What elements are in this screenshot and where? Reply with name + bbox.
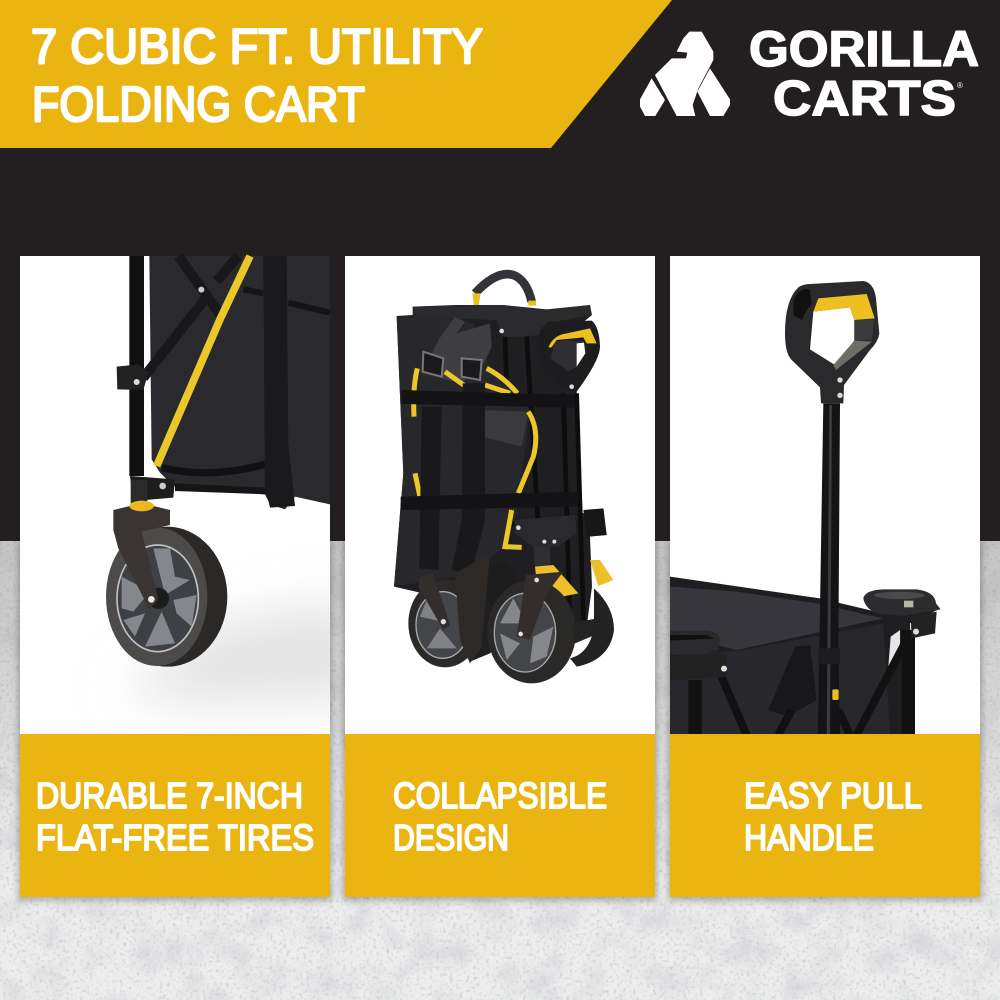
background: dark upper band <box>0 0 1000 541</box>
left cup holder <box>670 631 720 655</box>
floor shadow <box>140 594 330 716</box>
caption panel: collapsible: COLLAPSIBLE <box>393 775 607 816</box>
strap <box>263 256 295 508</box>
yellow trim <box>157 256 250 466</box>
left front wheel <box>408 579 482 667</box>
title: FOLDING CART <box>32 78 365 132</box>
photo: folded cart <box>394 274 614 683</box>
frame <box>505 337 583 627</box>
photo: cart with pull handle <box>670 281 941 735</box>
cart silhouette <box>394 305 607 662</box>
title <box>31 20 483 132</box>
back wheels <box>570 588 614 667</box>
panel: tires <box>20 253 330 734</box>
pull handle <box>539 321 600 392</box>
caption panel: tires: DURABLE 7-INCH <box>36 775 303 816</box>
caption panel: tires: FLAT-FREE TIRES <box>36 817 314 858</box>
photo area <box>670 256 980 734</box>
bracket <box>117 364 148 390</box>
title: 7 CUBIC FT. UTILITY <box>31 20 483 74</box>
caption panel: collapsible <box>345 734 655 897</box>
main front wheel <box>487 580 576 683</box>
gap beneath frame <box>888 630 900 667</box>
brand name: CARTS <box>773 72 956 126</box>
bag <box>149 256 330 509</box>
carry handle <box>475 274 532 302</box>
bag body <box>394 317 530 587</box>
panel drop shadows <box>18 541 982 901</box>
caption panel: collapsible: DESIGN <box>393 817 509 858</box>
header banner <box>0 0 672 148</box>
frame legs <box>720 633 910 735</box>
lower bracket <box>130 476 175 501</box>
caption panel: handle <box>670 734 980 897</box>
registered mark: ® <box>957 81 963 90</box>
cup holders <box>413 305 592 337</box>
vertical straps <box>419 383 485 575</box>
handle grip <box>785 281 879 403</box>
caption panel: handle: HANDLE <box>744 817 874 858</box>
bag rim <box>670 577 940 735</box>
photo area <box>20 256 330 734</box>
panel: handle <box>670 256 980 735</box>
photo area <box>345 256 655 734</box>
pole <box>129 256 144 476</box>
photo: cart frame and bag <box>117 256 330 509</box>
horizontal straps <box>401 390 578 510</box>
caption panel: handle: EASY PULL <box>744 775 922 816</box>
panel: collapsible <box>345 256 655 734</box>
brand name <box>749 21 979 126</box>
background: concrete texture <box>0 541 1000 1000</box>
logo: Gorilla Carts <box>640 21 979 126</box>
yellow trim <box>414 368 536 547</box>
icon: gorilla mark <box>640 32 730 116</box>
caption panel: tires <box>20 734 330 897</box>
brand name: GORILLA <box>749 21 979 77</box>
pull pole <box>818 403 840 735</box>
brace <box>143 256 238 378</box>
right cup holder <box>863 589 941 616</box>
icon: wheel <box>106 480 227 667</box>
folding brackets <box>515 515 577 547</box>
